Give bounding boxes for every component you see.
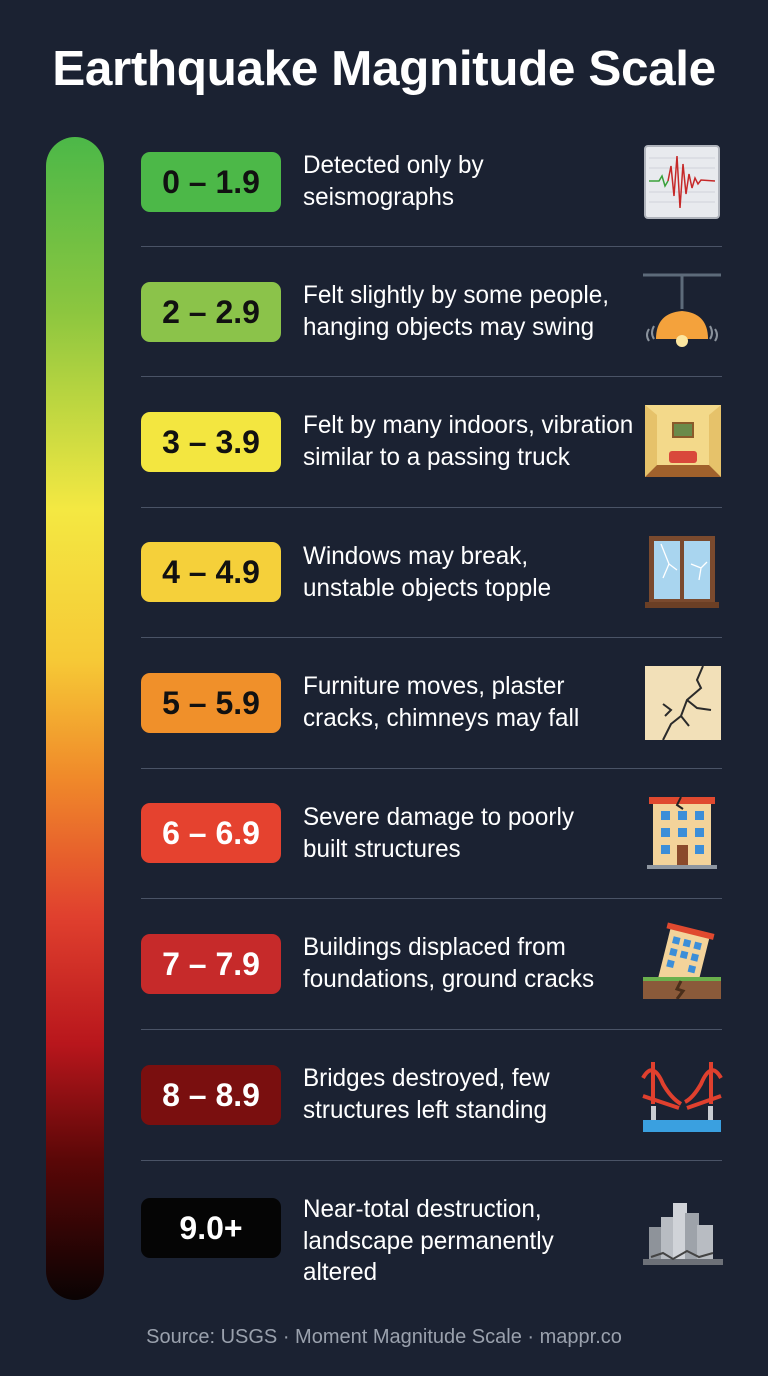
description: cracks, chimneys may fall — [303, 704, 579, 732]
description — [303, 1195, 554, 1286]
row: 2-2.9 — [141, 274, 721, 347]
description: unstable objects topple — [303, 574, 551, 602]
row: 8-8.9 — [141, 1062, 723, 1132]
icon: broken bridge — [641, 1062, 723, 1132]
description: foundations, ground cracks — [303, 964, 594, 992]
badge: 0 – 1.9 — [162, 164, 260, 200]
badge: 9.0+ — [179, 1210, 243, 1246]
icon: ruined city — [643, 1203, 723, 1265]
description: Furniture moves, plaster — [303, 672, 564, 700]
icon: cracked wall — [645, 666, 721, 740]
badge: 3 – 3.9 — [162, 424, 260, 460]
row: 6-6.9 — [141, 796, 717, 869]
badge — [141, 934, 281, 994]
description — [303, 411, 633, 470]
description — [303, 933, 594, 992]
badge: 4 – 4.9 — [162, 554, 260, 590]
row: 5-5.9 — [141, 666, 721, 740]
description — [303, 672, 579, 732]
badge — [141, 412, 281, 472]
row: 3-3.9 — [141, 405, 721, 477]
description: Felt slightly by some people, — [303, 281, 609, 309]
gradient scale bar — [46, 137, 104, 1300]
row: 9.0+ — [141, 1195, 723, 1286]
description: similar to a passing truck — [303, 442, 570, 470]
badge — [141, 673, 281, 733]
badge — [141, 542, 281, 602]
description: altered — [303, 1258, 377, 1286]
icon: hanging lamp — [643, 274, 721, 347]
footer source: Source: USGS · Moment Magnitude Scale · mappr.co — [146, 1326, 622, 1348]
badge: 5 – 5.9 — [162, 685, 260, 721]
description: Severe damage to poorly — [303, 803, 574, 831]
title: Earthquake Magnitude Scale — [52, 41, 716, 96]
description — [303, 803, 574, 862]
description: Bridges destroyed, few — [303, 1064, 550, 1092]
description: hanging objects may swing — [303, 312, 594, 340]
row: 0-1.9 — [141, 145, 720, 219]
badge: 7 – 7.9 — [162, 946, 260, 982]
description: landscape permanently — [303, 1226, 554, 1254]
icon: tilted building — [643, 922, 721, 999]
badge: 6 – 6.9 — [162, 815, 260, 851]
icon: broken window — [645, 536, 719, 608]
description — [303, 151, 484, 210]
badge: 8 – 8.9 — [162, 1077, 260, 1113]
description — [303, 281, 609, 340]
description: built structures — [303, 834, 461, 862]
description: Felt by many indoors, vibration — [303, 411, 633, 439]
badge — [141, 152, 281, 212]
badge — [141, 282, 281, 342]
row: 7-7.9 — [141, 922, 721, 999]
icon: seismograph — [644, 145, 720, 219]
description: Detected only by — [303, 151, 484, 179]
description — [303, 542, 551, 602]
icon: room — [645, 405, 721, 477]
description — [303, 1064, 550, 1124]
description: seismographs — [303, 182, 454, 210]
badge: 2 – 2.9 — [162, 294, 260, 330]
badge — [141, 1198, 281, 1258]
description: Near-total destruction, — [303, 1195, 542, 1223]
badge — [141, 803, 281, 863]
description: Windows may break, — [303, 542, 528, 570]
icon: damaged building — [647, 796, 717, 869]
description: Buildings displaced from — [303, 933, 566, 961]
row: 4-4.9 — [141, 536, 719, 608]
description: structures left standing — [303, 1096, 547, 1124]
badge — [141, 1065, 281, 1125]
